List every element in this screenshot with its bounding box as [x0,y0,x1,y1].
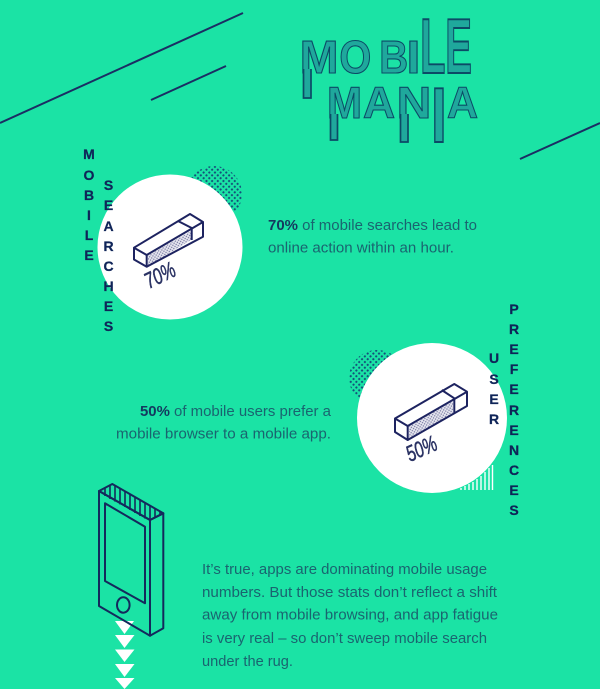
paragraph: closing text: is very real – so don’t sweep mobile search [202,630,487,647]
icon: downward white arrows [115,621,134,689]
title: Mobile Mania: E [445,4,472,91]
paragraph: closing text: away from mobile browsing, and app fatigue [202,606,498,624]
title: Mobile Mania: A [447,78,478,128]
paragraph: 70% stat: online action within an hour. [268,240,454,256]
vertical label: Searches: C [103,258,114,274]
label: 50%: 50% [402,431,441,467]
icon: 50% isometric bar [395,384,467,440]
vertical label: Searches: S [104,318,113,334]
vertical label: Preferences: E [509,482,519,498]
title: Mobile Mania [300,3,478,159]
decorative diagonal line top left [0,13,600,159]
paragraph: closing text: It’s true, apps are dominating mobile usage [202,561,487,578]
vertical label: Preferences: P [509,301,519,317]
title: Mobile Mania: M [300,31,338,83]
vertical label: Preferences: E [509,381,519,397]
vertical label: Searches: E [104,197,113,213]
vertical label: Searches: H [103,278,114,294]
icon: 70% isometric bar [134,214,203,267]
white circle, second stat [357,343,507,493]
vertical label: Preferences: S [509,502,519,518]
title: Mobile Mania: I [431,72,447,159]
vertical label: Searches: R [103,238,114,254]
paragraph: 50% stat: mobile browser to a mobile app. [116,426,331,442]
paragraph: 70% stat [268,217,477,256]
vertical label: Mobile: M [83,146,95,162]
vertical label: Mobile: I [87,207,91,223]
paragraph: closing text: under the rug. [202,653,293,670]
title: Mobile Mania: M [327,79,362,128]
vertical label: Mobile: L [85,227,94,243]
title: Mobile Mania: B [379,32,408,84]
vertical label: Searches: S [104,177,113,193]
title: Mobile Mania: I [406,32,420,84]
stripes, second stat [461,465,492,490]
vertical label: User [489,350,499,427]
label: 70%: 70% [140,257,180,294]
title: Mobile Mania: A [363,79,395,128]
paragraph: 70% stat: 70% of mobile searches lead to [268,217,477,234]
vertical label: Preferences: N [509,442,519,458]
vertical label: User: R [489,411,499,427]
vertical label: Mobile: O [84,167,95,183]
vertical label: Mobile [83,146,95,263]
vertical label: Mobile: E [84,247,94,263]
vertical label: Searches [103,177,114,334]
vertical label: Preferences: E [509,341,519,357]
icon: isometric phone [99,484,163,636]
vertical label: Preferences: E [509,422,519,438]
white circle, top stat [98,174,242,320]
paragraph: closing text [202,561,498,670]
paragraph: 50% stat [116,403,332,442]
vertical label: User: S [489,371,499,387]
vertical label: Preferences: C [509,462,519,478]
vertical label: Preferences: R [509,321,519,337]
vertical label: Mobile: B [84,187,94,203]
vertical label: Preferences: R [509,402,519,418]
vertical label: User: E [489,391,499,407]
title: Mobile Mania: N [397,78,431,128]
vertical label: Searches: A [103,218,114,234]
paragraph: closing text: numbers. But those stats don’t reflect a shift [202,584,498,601]
title: Mobile Mania: O [339,33,371,84]
halftone dot circle, second stat [349,350,405,406]
vertical label: User: U [489,350,499,366]
vertical label: Preferences [509,301,519,518]
title: Mobile Mania: L [420,3,445,90]
paragraph: 50% stat: 50% of mobile users prefer a [140,403,332,420]
halftone dot circle, top stat [186,166,242,222]
vertical label: Preferences: F [510,361,519,377]
vertical label: Searches: E [104,298,113,314]
